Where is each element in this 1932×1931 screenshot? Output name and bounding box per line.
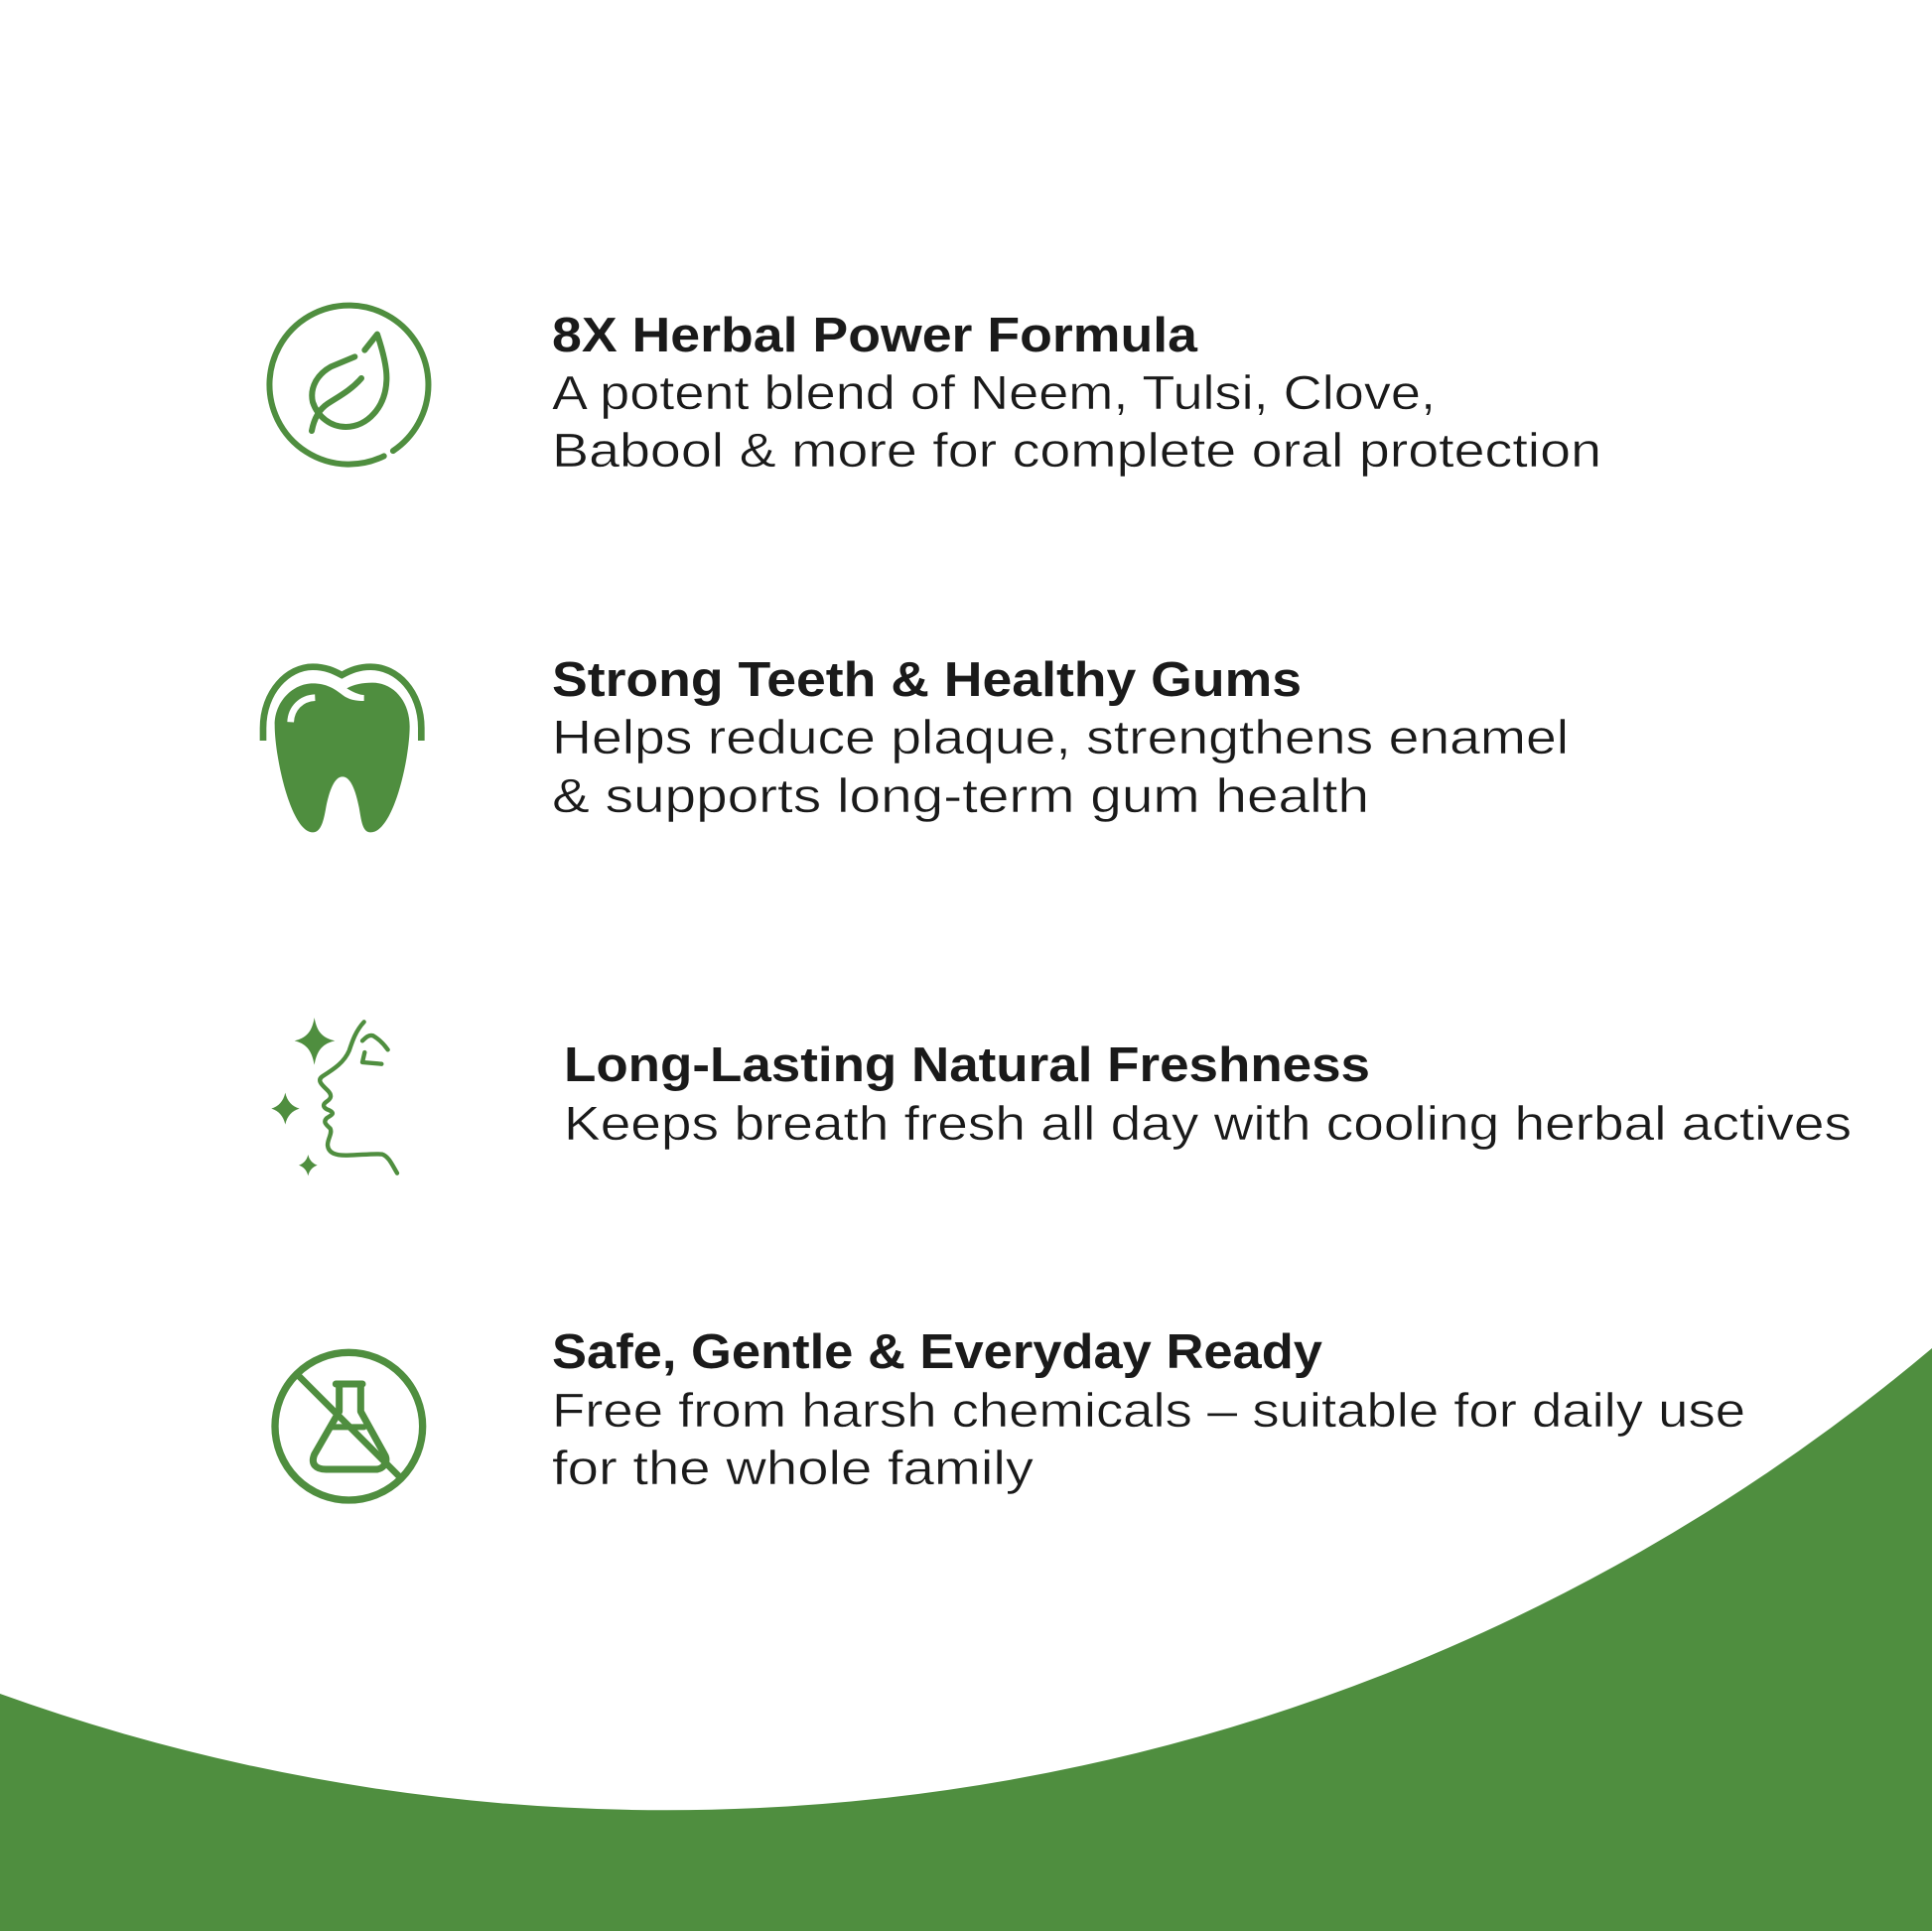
icon: face profile with sparkles (271, 1018, 397, 1175)
green curved footer wave (0, 1348, 1932, 1931)
panel: safe and gentle (275, 1325, 1745, 1500)
text: formula description line 1: A potent blend of Neem, Tulsi, Clove, (552, 367, 1436, 420)
panel: herbal power formula (269, 306, 1601, 478)
panel: natural freshness (271, 1018, 1852, 1175)
icon: crossed out flask (275, 1352, 423, 1500)
text: formula description line 2: Babool & more for complete oral protection (552, 425, 1601, 478)
text: teeth description line 2: & supports long-term gum health (552, 770, 1369, 823)
heading: natural freshness: Long-Lasting Natural Freshness (564, 1038, 1370, 1092)
text: safety description line 1: Free from harsh chemicals – suitable for daily use (552, 1385, 1745, 1438)
heading: safe and gentle: Safe, Gentle & Everyday Ready (552, 1325, 1322, 1379)
icon: tooth (263, 667, 421, 832)
text: safety description line 2: for the whole family (552, 1443, 1034, 1495)
heading: herbal power formula: 8X Herbal Power Formula (552, 309, 1198, 362)
text: teeth description line 1: Helps reduce plaque, strengthens enamel (552, 712, 1569, 764)
icon: leaf in circle (269, 306, 428, 465)
panel: strong teeth and gums (263, 653, 1569, 832)
heading: strong teeth: Strong Teeth & Healthy Gums (552, 653, 1302, 707)
text: freshness description: Keeps breath fresh all day with cooling herbal actives (564, 1098, 1852, 1151)
